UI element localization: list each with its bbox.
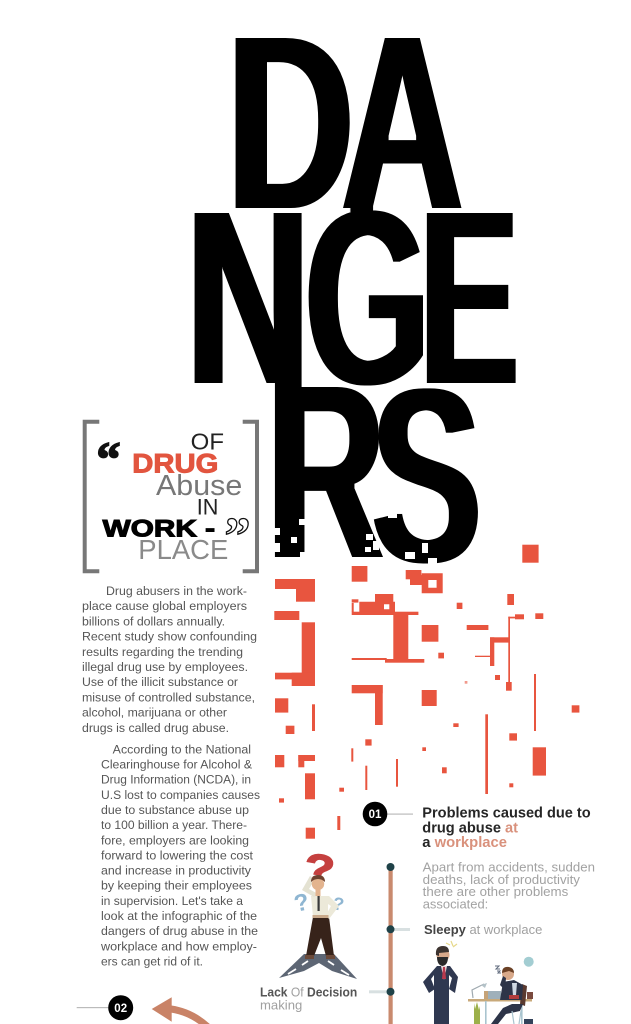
illustration: confused man on forked road [279,844,357,979]
section badge 01 [363,802,413,826]
illustration: boss and sleepy employee at desk [423,941,534,1024]
red pixel scatter [274,545,579,839]
right bracket [243,422,257,571]
text block: intro paragraph 2: According to the National [113,742,251,756]
subtitle text: Abuse [156,470,242,502]
desk with objects [468,957,534,1024]
text block: intro paragraph 1: drugs is called drug abuse. [82,721,229,735]
text block: intro paragraph 1: illegal drug use by employees. [82,660,248,674]
section badge 02: 02 [114,1003,127,1015]
question marks: ? [331,893,346,915]
title: DANGERS: R [267,331,385,614]
subtitle text: PLACE [138,534,228,565]
subtitle text: WORK - [103,516,215,543]
question marks: ? [292,888,312,918]
question marks [292,844,346,918]
man figure [302,875,339,959]
text block: intro paragraph 2: look at the infographic of the [101,909,257,923]
subtitle text [103,428,242,565]
forked road [279,954,357,979]
title: DANGERS [186,0,518,617]
icon: opening quote: “ [96,433,120,486]
text block: intro paragraph 2 [100,742,260,968]
heading: problems caused: a workplace [422,835,507,851]
label: lack of decision making [260,985,357,1012]
text block: intro paragraph 2: dangers of drug abuse in the [101,924,258,938]
text block: intro paragraph 2: Drug Information (NCDA), in [101,773,251,787]
text block: problems description [423,860,595,911]
text block: intro paragraph 2: workplace and how employ- [100,939,257,953]
title: DANGERS: E [420,157,518,439]
text block: problems description: Apart from accidents, sudden [423,860,595,875]
text block: problems description: deaths, lack of productivity [423,872,580,887]
title: DANGERS: G [305,156,430,439]
text block: intro paragraph 1: results regarding the trending [82,645,243,659]
text block: intro paragraph 1 [82,584,257,735]
subtitle text: OF [191,428,224,454]
question marks: ? [301,844,337,894]
text block: problems description: there are other problems [423,884,569,899]
text block: intro paragraph 2: ers can get rid of it. [101,954,203,968]
text block: intro paragraph 2: U.S lost to companies causes [101,788,260,802]
heading: problems caused [422,806,591,851]
pixel cut-outs in title letters [272,507,437,567]
icon: closing quote: ” [224,508,250,565]
text block: intro paragraph 2: in supervision. Let's take a [101,894,243,908]
label: lack of decision making: making [260,997,302,1012]
text block: intro paragraph 1: Use of the illicit substance or [82,675,238,689]
panel: quote subtitle [85,422,257,571]
text block: intro paragraph 2: Clearinghouse for Alcohol & [101,758,252,772]
label: lack of decision making: Lack Of Decision [260,985,357,1000]
section badge 02 [77,995,133,1020]
text block: intro paragraph 2: due to substance abuse up [101,803,249,817]
subtitle text: DRUG [132,448,218,478]
timeline bar with dots [369,863,410,1024]
text block: intro paragraph 1: alcohol, marijuana or other [82,706,227,720]
text block: intro paragraph 1: billions of dollars annually. [82,614,225,628]
sleepy employee [491,966,533,1024]
heading: problems caused: Problems caused due to [422,806,591,822]
text block: intro paragraph 1: Drug abusers in the work- [106,584,247,598]
left bracket [85,422,99,571]
title: DANGERS: S [371,336,481,617]
text block: intro paragraph 2: to 100 billion a year. There- [101,818,247,832]
text block: intro paragraph 2: and increase in productivity [101,864,252,878]
label: sleepy at workplace: Sleepy at workplace [424,922,542,937]
text block: intro paragraph 2: forward to lowering the cost [101,848,254,862]
text block: intro paragraph 1: place cause global employers [82,599,247,613]
text block: intro paragraph 1: misuse of controlled substance, [82,690,255,704]
text block: intro paragraph 2: by keeping their employees [101,879,252,893]
text block: problems description: associated: [423,896,488,911]
heading: problems caused: drug abuse at [422,820,518,836]
standing boss [423,941,458,1024]
title: DANGERS: N [186,156,310,439]
subtitle text: IN [197,494,218,519]
section badge 01: 01 [369,809,382,821]
text block: intro paragraph 1: Recent study show confounding [82,630,257,644]
text block: intro paragraph 2: fore, employers are looking [101,833,249,847]
arrow: curved pointing to badge 02 [152,997,209,1024]
